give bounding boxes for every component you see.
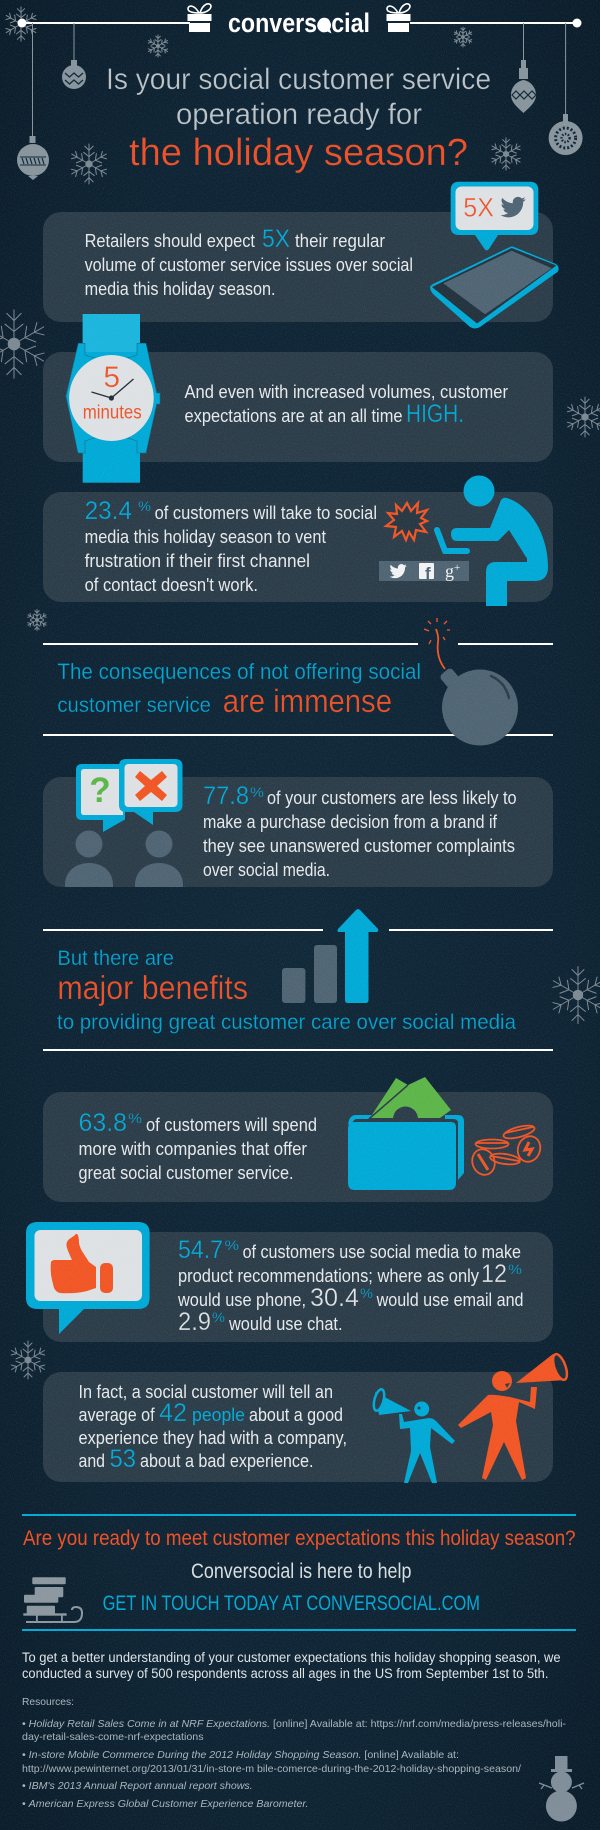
text: channel percentages: would use email and [376, 1290, 524, 1310]
icon: thumbs up bubble [26, 1222, 150, 1334]
text: channel percentages: % [225, 1237, 239, 1253]
text: 77.8 percent: they see unanswered customer complaints [203, 836, 515, 856]
icon: watch [66, 314, 160, 483]
resources: • In-store Mobile Commerce During the 2012 Holiday Shopping Season. [online] Available at: [22, 1749, 459, 1761]
resources: • American Express Global Customer Experience Barometer. [22, 1798, 309, 1810]
survey note [22, 1650, 561, 1681]
text: 42 people and 53: and [78, 1451, 105, 1471]
text: 23.4 percent: media this holiday season to vent [85, 527, 326, 547]
text: get in touch: GET IN TOUCH TODAY AT CONVERSOCIAL.COM [103, 1592, 480, 1615]
panel: 63.8% will spend more [43, 1077, 553, 1202]
panel: 5X volume [43, 182, 559, 328]
icon: coins [469, 1123, 544, 1178]
panel: 54.7% recommendations [26, 1222, 553, 1342]
text: 63.8 percent: great social customer service. [78, 1163, 294, 1183]
text: 5X statement: 5X [262, 225, 290, 253]
resources: Resources: [22, 1696, 74, 1708]
text: 77.8 percent [203, 782, 517, 880]
icon: social media bar: + [454, 562, 460, 574]
text: channel percentages: 54.7 [178, 1236, 223, 1264]
icon: ornament 3 [511, 60, 536, 113]
icon: ornament 2 [17, 136, 49, 180]
hanging ornaments [17, 23, 583, 180]
resources: day-retail-sales-come-nrf-expectations [22, 1731, 204, 1743]
icon: snowman [539, 1756, 584, 1822]
text: 63.8 percent: % [128, 1110, 142, 1126]
text: 42 people and 53: 42 [159, 1399, 187, 1427]
text: consequences heading: customer service [57, 694, 211, 717]
icon: orange person with megaphone [458, 1352, 570, 1480]
panel: 77.8% unanswered complaints [43, 759, 553, 887]
text: 5X statement: their regular [295, 231, 385, 251]
text: 63.8 percent: 63.8 [78, 1109, 127, 1137]
icon: bomb [424, 618, 518, 746]
text: 77.8 percent: over social media. [203, 860, 330, 880]
text: 5X statement: volume of customer service issues over social [85, 255, 413, 275]
text: 77.8 percent: make a purchase decision from a brand if [203, 812, 498, 832]
icon: sled with presents [23, 1577, 82, 1622]
text: 42 people and 53: 53 [110, 1445, 136, 1473]
icon: wallet with cash [348, 1077, 464, 1190]
text: 23.4 percent: 23.4 [85, 497, 132, 525]
resources: http://www.pewinternet.org/2013/01/31/in-store-m bile-comerce-during-the-2012-holiday-shopping-season/ [22, 1763, 521, 1775]
icon: 5X speech bubble [451, 182, 538, 250]
icon: blue person with megaphone [372, 1388, 455, 1483]
text: 63.8 percent: of customers will spend [146, 1115, 317, 1135]
icon: burst [386, 503, 427, 540]
text: consequences heading [57, 659, 421, 719]
survey note: conducted a survey of 500 respondents across all ages in the US from September 1st to 5th. [22, 1666, 548, 1681]
icon: X bubble [119, 759, 182, 825]
text: benefits heading: major benefits [57, 969, 248, 1006]
icon: tablet [430, 246, 559, 328]
icon: rising bars with arrow [282, 909, 378, 1003]
text: expectations: expectations are at an all time [184, 406, 402, 426]
icon: right gift [386, 4, 410, 32]
icon: left gift [188, 4, 212, 32]
divider heading: benefits [43, 909, 553, 1050]
text: 5X statement [85, 225, 413, 299]
text: 42 people and 53: about a good [249, 1405, 343, 1425]
text: 42 people and 53: experience they had with a company, [78, 1428, 347, 1448]
icon: social media bar: f [425, 564, 431, 583]
text: 23.4 percent: % [138, 498, 151, 514]
text: channel percentages: 12 [481, 1260, 507, 1288]
panel: 5 minutes expectation [43, 314, 553, 483]
panel: word of mouth [43, 1352, 570, 1483]
text: channel percentages: of customers use social media to make [243, 1242, 521, 1262]
icon: social media bar: g [445, 561, 454, 581]
resources: • IBM's 2013 Annual Report annual report shows. [22, 1780, 253, 1792]
text: 42 people and 53 [78, 1382, 347, 1473]
icon: 5X speech bubble: 5X [463, 193, 494, 223]
text: channel percentages: % [212, 1309, 225, 1325]
text: channel percentages: 2.9 [178, 1308, 211, 1336]
text: 23.4 percent: frustration if their first channel [85, 551, 310, 571]
title: Is your social customer service [106, 63, 491, 96]
text: 23.4 percent [85, 497, 377, 595]
call to action [22, 1515, 576, 1630]
text: channel percentages: would use chat. [228, 1314, 342, 1334]
text: 77.8 percent: % [250, 784, 264, 800]
text: channel percentages: 30.4 [310, 1284, 359, 1312]
icon: two people [65, 830, 183, 887]
icon: question bubble: ? [89, 771, 111, 810]
logo: conversocial [228, 8, 370, 38]
text: 42 people and 53: In fact, a social customer will tell an [78, 1382, 333, 1402]
text: expectations [184, 382, 508, 428]
text: 23.4 percent: of customers will take to social [155, 503, 377, 523]
title: operation ready for [176, 98, 422, 131]
icon: person at laptop [437, 476, 548, 606]
text: channel percentages [177, 1236, 524, 1336]
text: expectations: And even with increased volumes, customer [184, 382, 508, 402]
survey note: To get a better understanding of your customer expectations this holiday shopping season, we [22, 1650, 561, 1665]
text: here to help: Conversocial is here to help [191, 1560, 411, 1583]
icon: ornament 4 [549, 114, 583, 155]
icon: watch: 5 [103, 361, 120, 394]
header: string, gifts and logo [18, 4, 582, 38]
icon: social media bar [379, 561, 469, 583]
text: 5X statement: media this holiday season. [85, 279, 275, 299]
text: consequences heading: are immense [223, 683, 392, 719]
text: 42 people and 53: about a bad experience. [140, 1451, 314, 1471]
text: channel percentages: would use phone, [177, 1290, 306, 1310]
text: 42 people and 53: people [192, 1405, 245, 1425]
divider heading: consequences [43, 618, 553, 746]
text: 77.8 percent: of your customers are less likely to [267, 788, 517, 808]
text: 23.4 percent: of contact doesn't work. [85, 575, 258, 595]
text: 77.8 percent: 77.8 [203, 782, 249, 810]
text: 63.8 percent: more with companies that offer [78, 1139, 307, 1159]
text: 63.8 percent [78, 1109, 317, 1183]
text: benefits heading [57, 946, 516, 1034]
text: benefits heading: to providing great customer care over social media [57, 1010, 516, 1034]
icon: ornament 1 [62, 60, 86, 89]
text: expectations: HIGH. [406, 400, 464, 428]
text: channel percentages: % [360, 1285, 373, 1301]
text: channel percentages: % [508, 1261, 522, 1277]
text: benefits heading: But there are [57, 946, 174, 970]
icon: question bubble [76, 764, 125, 832]
title: the holiday season? [129, 132, 468, 174]
icon: watch: minutes [83, 402, 142, 423]
text: 5X statement: Retailers should expect [85, 231, 255, 251]
title [106, 63, 491, 174]
text: 42 people and 53: average of [78, 1405, 155, 1425]
text: channel percentages: product recommendations; where as only [178, 1266, 479, 1286]
text: consequences heading: The consequences of not offering social [57, 659, 421, 684]
resources [22, 1696, 567, 1810]
resources: • Holiday Retail Sales Come in at NRF Expectations. [online] Available at: https://nrf.com/media/press-releases/holi- [22, 1718, 567, 1730]
panel: 23.4% vent frustration [43, 476, 553, 606]
snowflakes [0, 7, 600, 1379]
